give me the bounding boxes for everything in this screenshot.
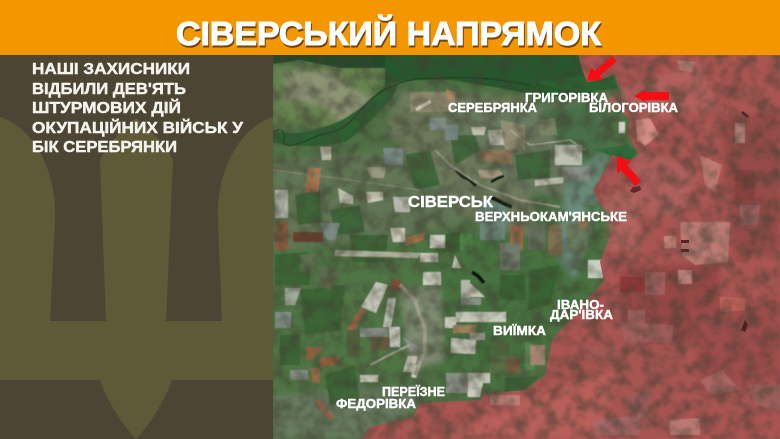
text block: summary	[32, 61, 244, 156]
label: Серебрянка: СЕРЕБРЯНКА	[448, 101, 537, 115]
text block: summary: ВІДБИЛИ ДЕВ'ЯТЬ	[32, 81, 186, 98]
central-south fields	[420, 253, 438, 262]
label: Білогорівка: БІЛОГОРІВКА	[589, 101, 678, 115]
text block: summary: ШТУРМОВИХ ДІЙ	[32, 98, 181, 117]
arrow: from south-east	[617, 156, 641, 186]
label: Івано-Дар'ївка: ІВАНО-	[557, 298, 604, 312]
label: Івано-Дар'ївка: ДАР'ІВКА	[550, 308, 613, 322]
label: Сіверськ: СІВЕРСЬК	[408, 194, 494, 211]
map labels	[336, 91, 678, 411]
text block: summary: БІК СЕРЕБРЯНКИ	[32, 139, 177, 156]
title: СІВЕРСЬКИЙ НАПРЯМОК	[176, 14, 602, 52]
title: СІВЕРСЬКИЙ НАПРЯМОК	[177, 16, 603, 54]
map panel	[273, 55, 780, 439]
left panel background	[0, 55, 273, 439]
map: fields	[275, 90, 625, 420]
text block: summary: НАШІ ЗАХИСНИКИ	[32, 61, 190, 78]
icon: trident watermark	[0, 117, 273, 439]
label: Виїмка: ВИЇМКА	[493, 323, 546, 338]
text block: summary: ОКУПАЦІЙНИХ ВІЙСЬК У	[32, 118, 244, 137]
label: Григорівка: ГРИГОРІВКА	[525, 91, 608, 105]
arrow: toward Bilohorivka	[634, 90, 669, 102]
label: Федорівка: ФЕДОРІВКА	[336, 397, 416, 411]
map: forest	[385, 55, 615, 97]
south-west fields	[361, 282, 388, 313]
label: Івано-Дар'ївка	[550, 298, 613, 322]
header band	[0, 0, 780, 55]
map: terrain	[273, 55, 640, 439]
map: occupied territory	[362, 55, 780, 439]
label: Верхньокам'янське: ВЕРХНЬОКАМ'ЯНСЬКЕ	[475, 210, 627, 224]
arrow: toward Hryhorivka	[587, 56, 617, 81]
map: texture	[273, 55, 780, 439]
label: Переїзне: ПЕРЕЇЗНЕ	[382, 384, 445, 399]
map: ponds and village strips	[456, 170, 476, 186]
map: hedges and darker plots	[275, 135, 560, 405]
